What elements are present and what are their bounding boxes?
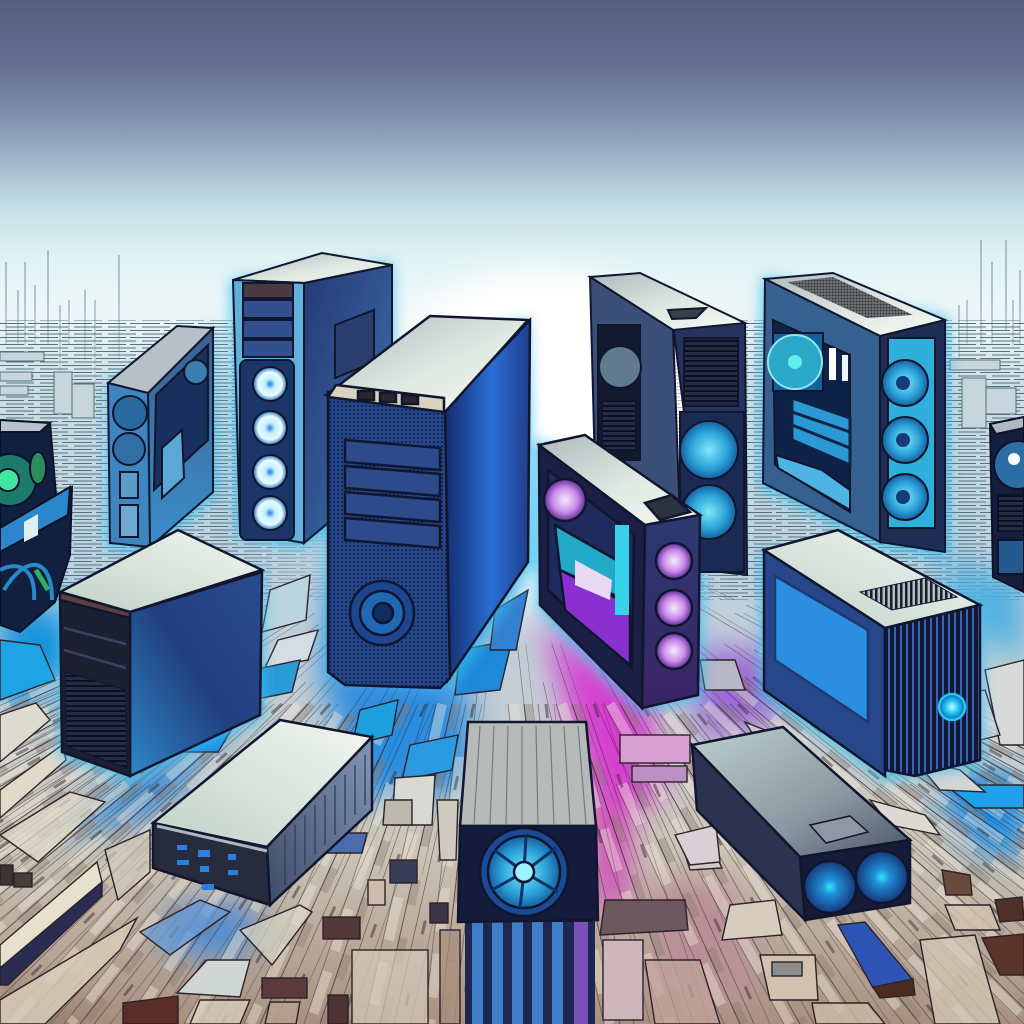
tower: large case with blue fan column	[763, 273, 945, 552]
planks and small components, right side	[600, 660, 1024, 1024]
far floor sketch lines	[0, 320, 1024, 600]
blue ribbon cables under fan	[465, 920, 595, 1024]
fine wood grain rays	[0, 605, 1024, 1024]
left edge component with green glow	[0, 420, 72, 632]
device: front-right twin-fan unit	[692, 727, 910, 920]
card: GPU with blue fan	[458, 722, 598, 922]
box: right desktop case with vents	[764, 530, 980, 776]
box: left desktop case	[60, 530, 262, 776]
floor base gradient	[0, 300, 1024, 1024]
tower: small left side-window case	[108, 326, 213, 547]
box: flat front-left device	[153, 720, 372, 905]
floor: circuit board planks	[0, 270, 1024, 1024]
soft colour patches on the floor	[0, 560, 1024, 1024]
case: glass RGB case with purple fans	[539, 435, 700, 708]
plank blocks following the perspective	[0, 650, 1024, 1024]
tower: tall case with side grille	[590, 273, 747, 575]
tower: big central mesh case	[326, 316, 530, 688]
tower: tall case with four glowing fans	[233, 253, 392, 543]
cyan glow around cases	[58, 262, 984, 782]
distant skyline lines	[6, 240, 1020, 430]
planks and small components, left side	[0, 575, 528, 1024]
white centre haze behind cases	[350, 270, 730, 610]
right edge component	[990, 417, 1024, 592]
